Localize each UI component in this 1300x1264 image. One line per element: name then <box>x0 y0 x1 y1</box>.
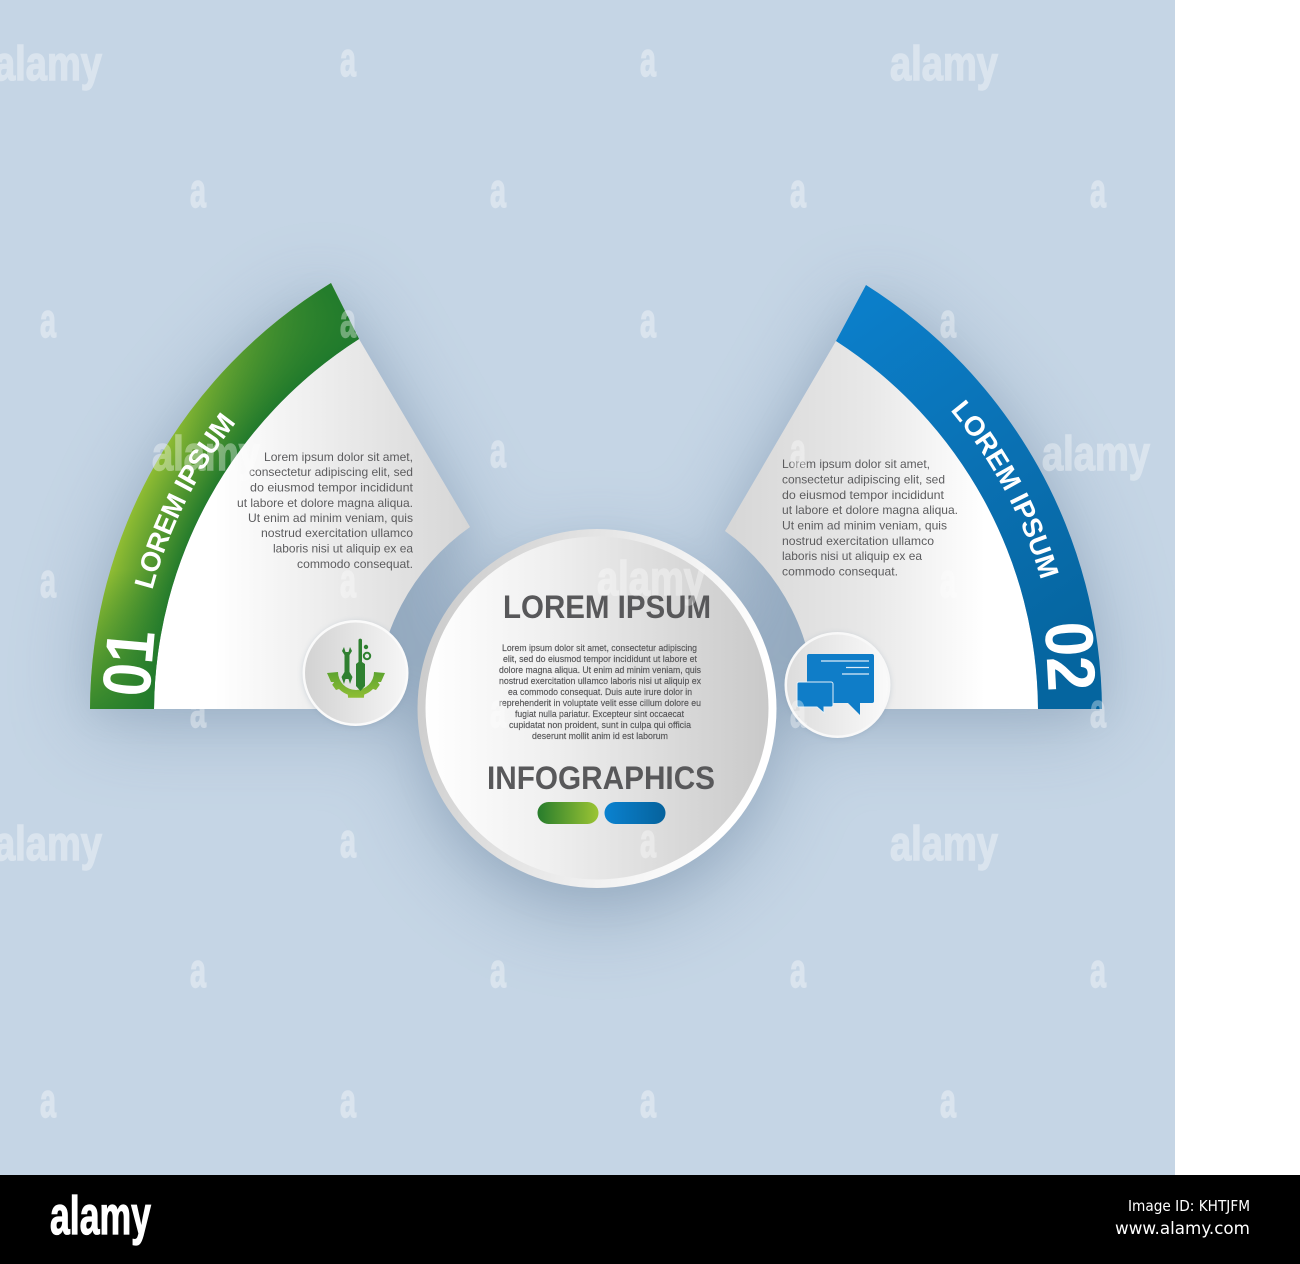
stock watermarks: a <box>640 295 656 348</box>
stock watermarks: a <box>940 295 956 348</box>
blue pill <box>604 802 666 824</box>
blue curved band <box>836 285 1102 709</box>
text block: step 01: do eiusmod tempor incididunt <box>250 480 414 494</box>
stock watermarks: alamy <box>597 553 705 606</box>
stock watermarks: a <box>40 1075 56 1128</box>
text block: step 02: laboris nisi ut aliquip ex ea <box>782 549 922 563</box>
panel: step 01 green sector <box>88 283 470 709</box>
footer logo: alamy <box>50 1186 151 1246</box>
stock watermarks: alamy <box>1042 428 1150 481</box>
heading: lorem ipsum: LOREM IPSUM <box>503 589 711 625</box>
stock watermarks: a <box>790 165 806 218</box>
white sector body <box>154 339 470 709</box>
text block: step 01 <box>237 450 414 571</box>
footer bar <box>0 1175 1300 1264</box>
stock watermarks: a <box>490 165 506 218</box>
stock watermarks: a <box>1090 685 1106 738</box>
text block: centre body <box>499 643 701 742</box>
text block: step 01: ut labore et dolore magna aliqua. <box>237 496 413 510</box>
stock watermarks: a <box>340 295 356 348</box>
stock watermarks: a <box>640 1075 656 1128</box>
text block: centre body: ea commodo consequat. Duis aute irure dolor in <box>508 687 692 698</box>
white sector body <box>725 341 1038 709</box>
text block: step 01: Lorem ipsum dolor sit amet, <box>264 450 413 464</box>
stock watermarks: a <box>340 815 356 868</box>
stock watermarks: a <box>340 1075 356 1128</box>
text block: step 01: consectetur adipiscing elit, sed <box>249 465 413 479</box>
panel: step 02 blue sector <box>725 285 1110 709</box>
outer ring <box>418 529 776 888</box>
text block: centre body: reprehenderit in voluptate velit esse cillum dolore eu <box>499 698 701 709</box>
stock watermarks: a <box>40 555 56 608</box>
stock watermarks: a <box>1090 165 1106 218</box>
soft drop shadows <box>90 288 1102 915</box>
text block: centre body: deserunt mollit anim id est laborum <box>532 731 668 742</box>
green pill <box>538 802 598 824</box>
stock watermarks <box>0 34 1150 1128</box>
text block: step 02 <box>782 457 958 578</box>
stock watermarks: a <box>340 555 356 608</box>
stock watermarks: a <box>190 945 206 998</box>
stock watermarks: alamy <box>890 38 998 91</box>
number 02: 02 <box>1030 620 1110 693</box>
stock watermarks: a <box>190 165 206 218</box>
stock watermarks: a <box>790 945 806 998</box>
text block: step 02: commodo consequat. <box>782 564 898 578</box>
heading: infographics: INFOGRAPHICS <box>487 760 715 796</box>
image id: Image ID: KHTJFM <box>1128 1197 1250 1215</box>
band title: LOREM IPSUM <box>951 400 1059 578</box>
stock watermarks: a <box>940 555 956 608</box>
text block: centre body: nostrud exercitation ullamco laboris nisi ut aliquip ex <box>499 676 701 687</box>
stock watermarks: alamy <box>890 818 998 871</box>
panel: central circle <box>418 529 776 888</box>
stock watermarks: a <box>340 34 356 87</box>
stock watermarks: a <box>940 1075 956 1128</box>
stock watermarks: a <box>790 425 806 478</box>
icon: tools and gear badge <box>302 620 408 727</box>
website: www.alamy.com <box>1115 1219 1250 1239</box>
text block: step 01: commodo consequat. <box>297 557 413 571</box>
stock watermarks: a <box>490 685 506 738</box>
text block: centre body: Lorem ipsum dolor sit amet, consectetur adipiscing <box>502 643 697 654</box>
stock watermarks: a <box>190 685 206 738</box>
stock watermarks: a <box>490 425 506 478</box>
text block: centre body: cupidatat non proident, sunt in culpa qui officia <box>509 720 692 731</box>
text block: centre body: fugiat nulla pariatur. Excepteur sint occaecat <box>515 709 684 720</box>
stock watermarks: a <box>640 34 656 87</box>
stock watermarks: a <box>1090 945 1106 998</box>
green curved band <box>90 283 359 709</box>
stock watermarks: a <box>40 295 56 348</box>
text block: step 01: nostrud exercitation ullamco <box>261 526 413 540</box>
text block: step 02: consectetur adipiscing elit, sed <box>782 472 945 486</box>
stock watermarks: a <box>640 815 656 868</box>
text block: step 02: Lorem ipsum dolor sit amet, <box>782 457 930 471</box>
number 01: 01 <box>88 627 170 699</box>
text block: centre body: elit, sed do eiusmod tempor incididunt ut labore et <box>503 654 697 665</box>
text block: step 01: laboris nisi ut aliquip ex ea <box>273 542 413 556</box>
band title: LOREM IPSUM <box>134 412 236 588</box>
icon: chat bubbles badge <box>784 632 890 739</box>
stock watermarks: alamy <box>152 428 260 481</box>
text block: step 02: ut labore et dolore magna aliqua. <box>782 503 958 517</box>
inner disc <box>426 536 768 880</box>
text block: step 02: Ut enim ad minim veniam, quis <box>782 518 947 532</box>
text block: step 02: do eiusmod tempor incididunt <box>782 488 945 502</box>
stock watermarks: a <box>490 945 506 998</box>
text block: step 02: nostrud exercitation ullamco <box>782 534 934 548</box>
text block: step 01: Ut enim ad minim veniam, quis <box>248 511 413 525</box>
text block: centre body: dolore magna aliqua. Ut enim ad minim veniam, quis <box>499 665 701 676</box>
stock watermarks: a <box>790 685 806 738</box>
